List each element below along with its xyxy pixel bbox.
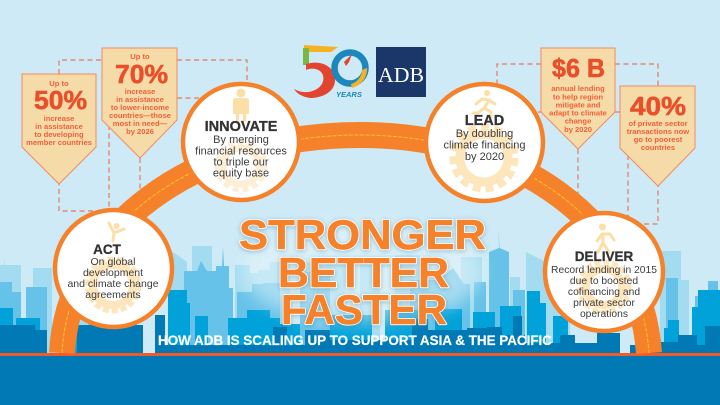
circle: innovate: equity base: [213, 168, 269, 180]
pentagon callout: $6 B: mitigate and: [556, 100, 601, 110]
pentagon callout: 70%: in assistance: [116, 95, 164, 104]
circle: innovate: financial resources: [195, 146, 287, 158]
bottom band: [0, 353, 720, 405]
main title: BETTER: [278, 249, 449, 296]
50 years logo: YEARS: [336, 90, 362, 99]
pentagon callout: $6 B: [541, 48, 615, 149]
pentagon callout: 40%: go to poorest: [634, 135, 683, 144]
pentagon callout: $6 B: annual lending: [551, 84, 605, 93]
circle: lead: By doubling: [456, 128, 513, 140]
pentagon callout: 70%: to lower-income: [111, 103, 169, 112]
circle: act: and climate change: [67, 278, 159, 290]
pentagon callout: $6 B: to help region: [553, 92, 603, 102]
pentagon callout: $6 B: $6 B: [552, 53, 605, 83]
pentagon callout: 50%: increase: [44, 114, 74, 123]
pentagon callout: 70%: 70%: [115, 59, 168, 89]
pentagon callout: 50%: to developing: [34, 130, 84, 139]
pentagon callout: $6 B: change: [565, 116, 591, 126]
pentagon callout: 70%: countries—those: [109, 111, 171, 120]
pentagon callout: 70%: [102, 48, 177, 158]
icon: cheering person: [109, 223, 124, 241]
circle: lead: climate financing: [444, 140, 525, 152]
pentagon callout: 50%: 50%: [34, 85, 87, 115]
pentagon callout: 50%: member countries: [26, 138, 92, 147]
pentagon callout: 70%: increase: [125, 87, 155, 96]
icon: gear: [87, 259, 139, 311]
pentagon callout: 40%: [620, 86, 695, 186]
circle: innovate: [183, 84, 299, 200]
pentagon callout: 50%: in assistance: [35, 122, 83, 131]
circle: lead: by 2020: [465, 151, 504, 163]
circle: act: development: [83, 267, 143, 279]
circle: innovate: to triple our: [213, 156, 269, 168]
subtitle: HOW ADB IS SCALING UP TO SUPPORT ASIA & THE PACIFIC: [158, 332, 552, 348]
icon: running person: [473, 90, 495, 117]
main title: STRONGER: [239, 211, 486, 258]
main title: FASTER: [281, 286, 447, 333]
main title: [239, 211, 486, 333]
circle: act: [55, 210, 172, 327]
circle: deliver: DELIVER: [575, 249, 634, 264]
icon: gear: [453, 127, 515, 189]
pentagon callout: 50%: [22, 74, 96, 184]
icon: standing person: [233, 88, 249, 122]
pentagon callout: 40%: of private sector: [628, 119, 688, 128]
icon: walking person: [597, 224, 614, 252]
icon: gear: [579, 262, 629, 312]
ADB logo: ADB: [378, 63, 424, 87]
dashed connectors: [59, 60, 658, 224]
circle: deliver: due to boosted: [570, 276, 638, 287]
circle: lead: LEAD: [465, 113, 504, 129]
main title: STRONGER: [239, 211, 486, 258]
pentagon callout: $6 B: by 2020: [564, 125, 592, 134]
circle: innovate: By merging: [213, 134, 269, 146]
icon: gear: [217, 142, 265, 190]
pentagon callout: 40%: transactions now: [627, 127, 689, 136]
circle: deliver: [545, 213, 663, 331]
circle: lead: [426, 84, 543, 201]
50 years logo: [294, 45, 367, 99]
circle: deliver: operations: [580, 309, 628, 320]
circle: act: agreements: [85, 289, 141, 301]
main title: BETTER: [278, 249, 449, 296]
pentagon callout: 50%: Up to: [49, 79, 69, 88]
pentagon callout: 40%: countries: [641, 143, 675, 152]
circle: act: On global: [91, 256, 135, 268]
circle: deliver: Record lending in 2015: [551, 265, 657, 276]
city skyline: [0, 228, 720, 353]
circle: innovate: INNOVATE: [205, 119, 278, 135]
ADB logo: [376, 47, 426, 97]
title glow veil: [242, 220, 482, 324]
pentagon callout: 70%: Up to: [130, 52, 150, 61]
orange arch road: [62, 135, 649, 353]
pentagon callout: $6 B: adapt to climate: [549, 108, 607, 118]
circle: deliver: cofinancing and: [568, 287, 640, 298]
pentagon callout: 70%: most in need—: [113, 119, 168, 128]
circle: deliver: private sector: [573, 298, 635, 309]
circle: act: ACT: [93, 242, 122, 257]
pentagon callout: 40%: 40%: [630, 91, 686, 121]
pentagon callout: 70%: by 2026: [126, 127, 154, 136]
main title: FASTER: [281, 286, 447, 333]
